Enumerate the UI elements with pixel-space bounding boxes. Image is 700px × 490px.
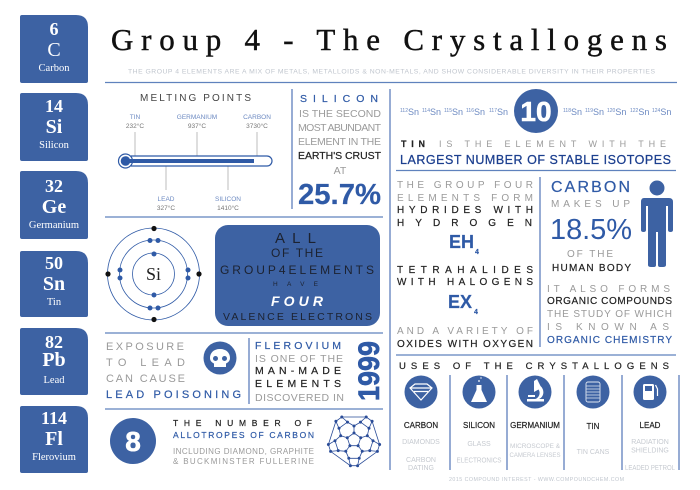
- label: silicon: [215, 196, 241, 212]
- panel: hydrides and halogens: HYDRIDES WITH: [397, 205, 533, 216]
- tile: lead: 82: [45, 332, 63, 352]
- label: germanium: GERMANIUM: [177, 114, 217, 121]
- label: tin: 232°C: [126, 122, 144, 130]
- callout: valence electrons: VALENCE ELECTRONS: [223, 311, 372, 323]
- isotope row: 117: [489, 108, 497, 114]
- tile: tin: [20, 251, 88, 317]
- panel: silicon abundance: IS THE SECOND: [299, 108, 381, 120]
- use: silicon: ELECTRONICS: [456, 458, 502, 464]
- panel: carbon in human body: MAKES UP: [551, 199, 630, 210]
- panel: silicon abundance: EARTH'S CRUST: [298, 150, 382, 162]
- tile: tin: Sn: [43, 273, 65, 295]
- formula: EX4: EX: [448, 292, 472, 312]
- label: silicon: 1410°C: [217, 204, 239, 212]
- isotope row: 114: [422, 108, 430, 114]
- use: tin: [576, 376, 610, 456]
- label: tin: [126, 114, 144, 130]
- panel: lead poisoning: LEAD POISONING: [106, 389, 241, 401]
- thermometer: [118, 154, 272, 168]
- panel: carbon in human body: ORGANIC COMPOUNDS: [547, 296, 672, 307]
- isotope row: Sn: [593, 107, 604, 117]
- use: lead: LEADED PETROL: [625, 465, 675, 472]
- panel: silicon abundance: [298, 93, 382, 211]
- tile: silicon: [20, 93, 88, 161]
- tile: tin: 50: [45, 253, 63, 273]
- panel: tin isotopes: LARGEST NUMBER OF STABLE ISOTOPES: [400, 153, 671, 167]
- icon: skull: [204, 342, 236, 374]
- callout: valence electrons: ALL: [275, 230, 316, 247]
- diagram: silicon atom: [105, 226, 202, 322]
- tile: carbon: Carbon: [39, 63, 70, 74]
- panel: tin isotopes: TIN: [401, 139, 425, 149]
- use: tin: TIN: [587, 422, 600, 431]
- tile: flerovium: Flerovium: [32, 452, 76, 463]
- use: germanium: MICROSCOPE &: [510, 443, 561, 450]
- panel: carbon in human body: ORGANIC CHEMISTRY: [547, 335, 672, 346]
- panel: carbon in human body: HUMAN BODY: [552, 263, 631, 274]
- panel: allotropes of carbon: [110, 417, 380, 466]
- label: lead: LEAD: [158, 196, 175, 203]
- statistic: 25.7%: 25.7%: [298, 179, 381, 211]
- panel: melting points chart: [118, 93, 272, 212]
- use: carbon: CARBON: [404, 421, 438, 430]
- formula: EH4: EH: [449, 232, 474, 252]
- panel: allotropes of carbon: ALLOTROPES OF CARBON: [173, 430, 314, 440]
- panel: flerovium: ELEMENTS: [255, 378, 341, 390]
- use: germanium: [510, 376, 561, 459]
- label: lead: [157, 196, 175, 212]
- tile: flerovium: Fl: [45, 428, 63, 450]
- footer credit: 2015 COMPOUND INTEREST - WWW.COMPOUNDCHEM.COM: [449, 477, 624, 483]
- panel: carbon in human body: OF THE: [567, 249, 613, 260]
- formula: EX4: [448, 292, 478, 316]
- use: carbon: DIAMONDS: [402, 439, 440, 446]
- panel: silicon abundance: SILICON: [300, 93, 378, 105]
- panel: carbon in human body: IS KNOWN AS: [547, 322, 669, 333]
- isotope row: 122: [630, 108, 639, 114]
- isotope row: Sn: [615, 107, 626, 117]
- isotope row: Sn: [638, 107, 649, 117]
- isotope row: Sn: [660, 107, 671, 117]
- melting points heading: MELTING POINTS: [140, 93, 251, 104]
- callout: valence electrons: GROUP4ELEMENTS: [220, 263, 374, 277]
- tile: germanium: 32: [45, 176, 63, 196]
- use: germanium: CAMERA LENSES: [510, 452, 561, 459]
- label: germanium: 937°C: [188, 122, 206, 130]
- panel: silicon abundance: MOST ABUNDANT: [298, 122, 382, 134]
- use: lead: LEAD: [640, 421, 661, 430]
- use: tin: TIN CANS: [577, 449, 610, 456]
- use: lead: RADIATION: [631, 439, 669, 446]
- subtitle: THE GROUP 4 ELEMENTS ARE A MIX OF METALS, METALLOIDS & NON-METALS, AND SHOW CONSIDERABLE DIVERSITY IN THEIR PROPERTIES: [128, 68, 655, 76]
- isotope row: Sn: [408, 107, 419, 117]
- statistic: 18.5%: 18.5%: [550, 214, 632, 246]
- panel: flerovium: DISCOVERED IN: [255, 392, 344, 404]
- tile: germanium: Germanium: [29, 220, 79, 231]
- panel: lead poisoning: TO LEAD: [106, 357, 185, 369]
- panel: lead poisoning: EXPOSURE: [106, 341, 184, 353]
- panel: hydrides and halogens: OXIDES WITH OXYGEN: [397, 339, 533, 350]
- tile: flerovium: [20, 406, 88, 473]
- use: silicon: GLASS: [467, 441, 491, 448]
- panel: flerovium: IS ONE OF THE: [255, 353, 343, 365]
- isotope row: 124: [652, 108, 661, 114]
- icon: human figure: [641, 180, 673, 267]
- panel: flerovium: FLEROVIUM: [255, 340, 341, 352]
- tile: germanium: Ge: [42, 196, 66, 218]
- callout: valence electrons: [215, 225, 380, 326]
- isotope row: 118: [563, 108, 571, 114]
- tile: silicon: Si: [46, 116, 63, 138]
- tile: germanium: [20, 171, 88, 239]
- year: 1999: 1999: [353, 341, 386, 401]
- label: tin: TIN: [130, 114, 141, 121]
- label: carbon: [243, 114, 271, 130]
- tile: carbon: C: [47, 39, 61, 61]
- label: germanium: [177, 114, 217, 130]
- tile: silicon: Silicon: [39, 140, 70, 151]
- panel: allotropes of carbon: INCLUDING DIAMOND, GRAPHITE: [173, 447, 314, 456]
- panel: carbon in human body: THE STUDY OF WHICH: [547, 309, 672, 320]
- label: carbon: CARBON: [243, 114, 271, 121]
- panel: carbon in human body: [547, 179, 673, 346]
- icon: buckminsterfullerene: [328, 417, 380, 466]
- panel: lead poisoning: [106, 341, 241, 401]
- panel: silicon abundance: AT: [334, 165, 347, 177]
- panel: hydrides and halogens: ELEMENTS FORM: [397, 193, 533, 204]
- tile: lead: Pb: [42, 349, 66, 371]
- use: carbon: CARBON: [406, 457, 436, 464]
- panel: flerovium: MAN-MADE: [255, 365, 341, 377]
- panel: carbon in human body: IT ALSO FORMS: [547, 284, 670, 295]
- badge: 8: 8: [125, 426, 141, 457]
- panel: hydrides and halogens: HYDROGEN: [397, 218, 532, 229]
- use: silicon: SILICON: [463, 421, 495, 430]
- isotope row: Sn: [571, 107, 582, 117]
- panel: allotropes of carbon: THE NUMBER OF: [173, 418, 312, 428]
- tile: lead: Lead: [44, 375, 65, 386]
- use: carbon: DATING: [408, 465, 434, 472]
- isotope row: Sn: [497, 107, 508, 117]
- tile: tin: Tin: [47, 297, 62, 308]
- formula: EH4: 4: [475, 249, 479, 256]
- use: lead: [625, 376, 675, 472]
- panel: flerovium: [255, 340, 386, 404]
- tile: silicon: 14: [45, 96, 63, 116]
- tile: flerovium: 114: [41, 408, 67, 428]
- panel: hydrides and halogens: AND A VARIETY OF: [397, 326, 533, 337]
- use: silicon: [456, 376, 502, 464]
- badge: 10: [514, 89, 558, 133]
- isotope row: 112: [400, 108, 408, 114]
- label: lead: 327°C: [157, 204, 175, 212]
- use: carbon: [402, 376, 440, 472]
- isotope row: Sn: [430, 107, 441, 117]
- isotope row: 115: [444, 108, 452, 114]
- formula: EX4: 4: [474, 309, 478, 316]
- panel: hydrides and halogens: WITH HALOGENS: [397, 277, 533, 288]
- isotope row: 119: [585, 108, 593, 114]
- title: Group 4 - The Crystallogens: [111, 22, 667, 57]
- callout: valence electrons: HAVE: [273, 281, 319, 288]
- isotope row: [400, 107, 671, 117]
- isotope row: 116: [466, 108, 474, 114]
- tile: carbon: [20, 15, 88, 83]
- uses heading: USES OF THE CRYSTALLOGENS: [399, 361, 669, 372]
- isotope row: Sn: [474, 107, 485, 117]
- panel: lead poisoning: CAN CAUSE: [106, 373, 185, 385]
- label: carbon: 3730°C: [246, 122, 268, 130]
- panel: hydrides and halogens: THE GROUP FOUR: [397, 180, 533, 191]
- label: silicon: SILICON: [215, 196, 241, 203]
- panel: uses of the crystallogens: [399, 361, 675, 472]
- tile: lead: [20, 328, 88, 395]
- formula: EH4: [449, 232, 479, 256]
- diagram: silicon atom: Si: [146, 264, 161, 284]
- isotope row: Sn: [452, 107, 463, 117]
- panel: allotropes of carbon: & BUCKMINSTER FULLERINE: [173, 457, 314, 466]
- panel: hydrides and halogens: TETRAHALIDES: [397, 265, 533, 276]
- panel: carbon in human body: CARBON: [551, 179, 630, 196]
- badge: 8: [110, 418, 156, 464]
- use: germanium: GERMANIUM: [510, 421, 560, 430]
- callout: valence electrons: OF THE: [271, 246, 323, 260]
- panel: tin isotopes: [400, 89, 671, 167]
- use: lead: SHIELDING: [631, 448, 669, 454]
- callout: valence electrons: FOUR: [271, 293, 324, 309]
- element tiles column: [20, 15, 88, 473]
- isotope row: 120: [607, 108, 616, 114]
- panel: silicon abundance: ELEMENT IN THE: [298, 136, 381, 148]
- panel: tin isotopes: IS THE ELEMENT WITH THE: [439, 139, 666, 149]
- panel: hydrides and halogens: [397, 180, 533, 350]
- tile: carbon: 6: [50, 19, 58, 39]
- badge: 10: 10: [520, 96, 552, 127]
